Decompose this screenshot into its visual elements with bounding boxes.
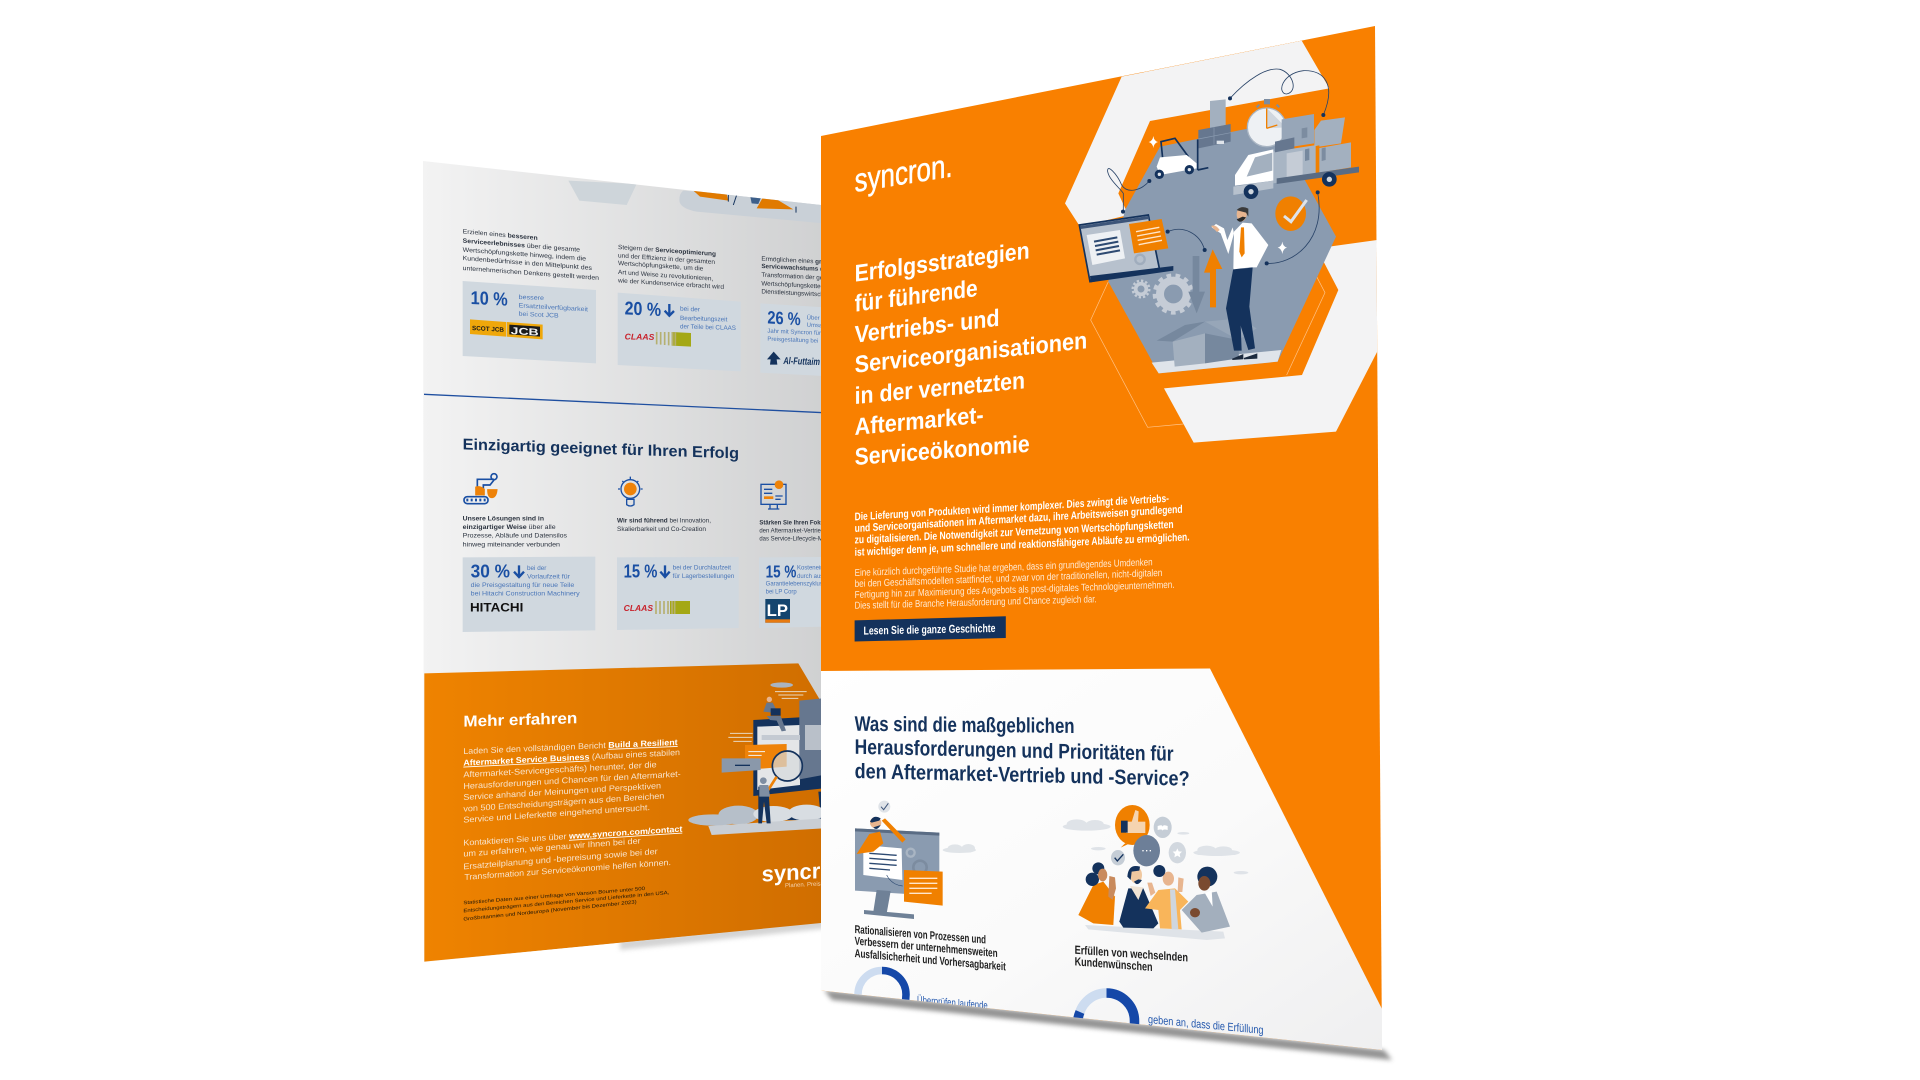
- open box: [1157, 318, 1257, 367]
- text: contact paragraph: um zu erfahren, wie genau wir Ihnen bei der: [463, 835, 641, 859]
- stat card: 10 %: 10 %: [471, 287, 508, 310]
- text: column 1: [463, 228, 600, 282]
- stat card: 15 % LP: bei LP Corp: [766, 589, 797, 595]
- text: report paragraph: Aftermarket-Servicegeschäfts) herunter, der die: [463, 759, 657, 779]
- section: learn more: [424, 663, 847, 962]
- panel: challenges section: [821, 668, 1382, 1050]
- text: study paragraph: Dies stellt für die Branche Herausforderung und Chance zugleich dar.: [855, 594, 1097, 612]
- text: report paragraph: Service anhand der Meinungen und Perspektiven: [463, 780, 661, 802]
- clouds: [1063, 819, 1248, 874]
- text: intro paragraph: ist wichtiger denn je, um schnellere und reaktionsfähigere Abläufe zu ermöglichen.: [855, 531, 1190, 559]
- icon: check badge: [1275, 196, 1307, 231]
- white hexagon frame upper: [1065, 41, 1329, 227]
- heading: Mehr erfahren: Mehr erfahren: [463, 710, 577, 731]
- outline hexagon: [1091, 282, 1183, 427]
- icon: light bulb: [618, 477, 643, 506]
- stat card: 15 % LP: Kosteneinsparung: [797, 565, 845, 571]
- page background left: [423, 161, 821, 962]
- text: column 2: wie der Kundenservice erbracht wird: [617, 277, 724, 291]
- text: report paragraph: von 500 Entscheidungsträgern aus den Bereichen: [463, 790, 665, 814]
- icon: check bubble: [878, 801, 890, 813]
- illustration: monitor and sheets: [855, 801, 976, 919]
- logo: syncron footer: syncron: [762, 857, 847, 887]
- text: column 2: und der Effizienz in der gesamten: [618, 252, 715, 266]
- text: strength 3: das Service-Lifecycle-Management: [759, 536, 853, 542]
- text: strength 3: [760, 520, 821, 542]
- panel: right brochure page: [821, 26, 1392, 1060]
- path lines: [1108, 69, 1329, 263]
- logo: Scot JCB: [470, 319, 543, 339]
- small bubbles: [1111, 817, 1186, 865]
- stat card: 15 %: [617, 557, 739, 630]
- floor: [1152, 350, 1281, 373]
- logo: syncron: syncron.: [855, 148, 953, 200]
- stat card: 15 %: für Lagerbestellungen: [673, 573, 735, 580]
- stat card: 20 %: bei der: [680, 306, 700, 313]
- scene: two tilted brochure pages: [423, 26, 1394, 1063]
- text: report paragraph: Laden Sie den vollständigen Bericht Build a Resilient: [463, 737, 678, 756]
- bubble: chat: [1133, 835, 1160, 866]
- arrows up and down: [1188, 249, 1222, 313]
- stat card: 20 %: [618, 293, 741, 371]
- text: column 2: [617, 244, 724, 291]
- text: column 3: Wertschöpfungskette,: [761, 280, 823, 290]
- truck with cargo: [1233, 114, 1359, 199]
- text: contact paragraph: Transformation zur Serviceökonomie helfen können.: [464, 857, 671, 882]
- text: column 1: Erzielen eines besseren: [463, 228, 538, 242]
- clock: [1247, 99, 1286, 147]
- text: column 3: Ermöglichen eines größeren: [761, 256, 843, 267]
- text: strength 3: den Aftermarket-Vertrieb und: [759, 528, 836, 534]
- button: Lesen Sie die ganze Geschichte: [855, 616, 1006, 642]
- icon: sparkles: [1149, 136, 1287, 254]
- stat card: 15 % LP: Garantielebenszyklus: [766, 582, 823, 588]
- stat card: 26 %: Über: [807, 314, 820, 322]
- table: [1085, 925, 1225, 940]
- text: study paragraph: bei den Geschäftsmodellen stattfindet, und zwar von der traditionellen, nicht-digitalen: [855, 568, 1162, 590]
- stat card: 26 %: Jahr mit Syncron für: [767, 329, 821, 337]
- text: report paragraph: Aftermarket Service Business (Aufbau eines stabilen: [463, 747, 680, 768]
- stat card: 15 %: 15 %: [624, 561, 658, 582]
- stacked boxes centre: [1198, 99, 1231, 148]
- text: intro paragraph: zu digitalisieren. Die Notwendigkeit zur Vernetzung von Wertschöpfungsketten: [855, 519, 1174, 546]
- white hexagon frame lower: [1164, 240, 1381, 443]
- text: column 1: Wertschöpfungskette hinweg, indem die: [463, 247, 587, 263]
- stat card: 26 %: Preisgestaltung bei: [767, 337, 818, 345]
- title: Erfolgsstrategien: Aftermarket-: [855, 402, 984, 441]
- stat card: 15 % LP: 15 %: [766, 562, 796, 582]
- text: column 3: [761, 256, 821, 296]
- text: column 3: Dienstleistungswirtschaft: [761, 288, 831, 299]
- logo: Scot JCB: JCB: [511, 326, 539, 339]
- text: footnote: Statistische Daten aus einer Umfrage von Vanson Bourne unter 500: [463, 886, 645, 906]
- cloud: [943, 844, 976, 853]
- text: study paragraph: Fertigung hin zur Maximierung des Angebots als post-digitales Technologieunternehmen.: [855, 580, 1175, 601]
- person: woman orange: [1078, 862, 1116, 925]
- heading: Herausforderungen: [855, 713, 1190, 791]
- icon: down arrow: [665, 304, 674, 316]
- stat card: 30 %: die Preisgestaltung für neue Teile: [471, 582, 575, 589]
- decorative tab: [568, 181, 637, 205]
- icon: down arrow: [514, 565, 524, 577]
- title: Erfolgsstrategien: Serviceorganisationen: [855, 327, 1087, 379]
- illustration: monitor and magnifier: [688, 682, 825, 835]
- logo: CLAAS: CLAAS: [625, 331, 655, 342]
- title: Erfolgsstrategien: [855, 237, 1087, 471]
- gears: [1133, 275, 1192, 313]
- text: contact paragraph: Ersatzteilplanung und -bepreisung sowie bei der: [463, 846, 658, 871]
- text: priority 2: [1075, 943, 1188, 974]
- text: strength 2: [617, 518, 710, 531]
- stat card: 15 % LP: durch aus: [797, 574, 823, 580]
- logo: Hitachi: HITACHI: [470, 602, 523, 615]
- text: column 2: Art und Weise zu revolutionieren,: [618, 269, 714, 283]
- text: report paragraph: [463, 737, 681, 825]
- text: column 1: Serviceerlebnisses über die gesamte: [463, 238, 581, 254]
- section: top results: [424, 181, 847, 462]
- text: intro paragraph: und Serviceorganisationen im Aftermarket dazu, ihre Arbeitsweisen grundlegend: [855, 504, 1183, 535]
- bubble: thumbs up: [1115, 805, 1150, 848]
- title: Erfolgsstrategien: in der vernetzten: [855, 367, 1025, 410]
- text: column 3: Servicewachstums durch die: [761, 263, 847, 274]
- text: report paragraph: Herausforderungen und Chancen für den Aftermarket-: [463, 769, 681, 791]
- icon: monitor with gear: [761, 480, 786, 509]
- top illustration fragment: [679, 191, 823, 223]
- logo: CLAAS: CLAAS: [624, 603, 653, 613]
- heading: Herausforderungen: den Aftermarket-Vertrieb und -Service?: [855, 760, 1190, 791]
- text: stat left: Überprüfen laufende: [917, 994, 988, 1012]
- stat card: 20 %: Bearbeitungszeit: [680, 315, 728, 323]
- text: priority 1: Verbessern der unternehmensweiten: [855, 936, 998, 960]
- icon: excavator: [464, 474, 497, 504]
- section: strengths: [463, 474, 853, 632]
- logo: Scot JCB: SCOT JCB: [472, 325, 504, 334]
- page shadow right: [824, 990, 1392, 1060]
- donut chart right: [1078, 993, 1134, 1049]
- text: study paragraph: [855, 557, 1175, 612]
- title: Erfolgsstrategien: Erfolgsstrategien: [855, 237, 1030, 288]
- stat card: 30 %: 30 %: [471, 561, 510, 582]
- text: column 2: Steigern der Serviceoptimierung: [618, 244, 716, 258]
- white section background: [821, 668, 1382, 1050]
- text: column 1: Kundenbedürfnisse in den Mittelpunkt des: [463, 255, 592, 272]
- text: priority 1: Rationalisieren von Prozessen und: [855, 924, 986, 947]
- stat card: 20 %: der Teile bei CLAAS: [680, 323, 736, 332]
- stat card: 30 %: Vorlaufzeit für: [527, 573, 570, 580]
- text: strength 1: Unsere Lösungen sind in: [463, 516, 544, 523]
- text: priority 2: Kundenwünschen: [1075, 954, 1153, 974]
- logo: syncron footer: [762, 866, 820, 888]
- stat card: 10 %: bei Scot JCB: [519, 311, 559, 320]
- text: strength 1: einzigartiger Weise über alle: [463, 524, 556, 531]
- text: strength 2: Wir sind führend bei Innovation,: [617, 517, 711, 524]
- laptop: [1079, 215, 1173, 282]
- page background orange: [821, 26, 1382, 1050]
- stat card: 20 %: 20 %: [625, 297, 661, 320]
- heading: Einzigartig geeignet: Einzigartig geeignet für Ihren Erfolg: [463, 436, 739, 462]
- text: priority 1: [855, 924, 1006, 973]
- icon: down arrow: [660, 565, 670, 577]
- person: man navy: [1119, 866, 1158, 928]
- logo: syncron footer: Planen. Preis: [785, 882, 821, 889]
- button: Lesen Sie die ganze Geschichte: Lesen Sie die ganze Geschichte: [864, 623, 996, 638]
- text: strength 1: Prozesse, Abläufe und Datensilos: [463, 532, 567, 539]
- forklift: [1155, 138, 1208, 179]
- stat card: 10 %: bessere: [519, 294, 545, 302]
- stat card: 15 %: bei der Durchlaufzeit: [673, 565, 731, 572]
- text: column 1: unternehmerischen Denkens gestellt werden: [463, 265, 600, 282]
- person: woman light orange: [1145, 865, 1188, 929]
- text: footnote: [463, 886, 669, 923]
- stat card: 15 % LP: [761, 557, 821, 628]
- stat card: 30 %: bei Hitachi Construction Machinery: [471, 590, 581, 597]
- text: study paragraph: Eine kürzlich durchgeführte Studie hat ergeben, dass ein grundlegendes Umdenken: [855, 557, 1153, 579]
- stat card: 30 %: [463, 557, 595, 632]
- stat card: 30 %: bei der: [527, 565, 546, 572]
- text: stat right: geben an, dass die Erfüllung: [1148, 1014, 1264, 1037]
- logo: LP: LP: [767, 601, 788, 620]
- heading: Herausforderungen: Herausforderungen und Prioritäten für: [855, 736, 1174, 766]
- person: man grey: [1182, 867, 1230, 933]
- text: report paragraph: Service und Lieferkette eingehend untersucht.: [463, 802, 650, 825]
- page shadow left: [620, 918, 830, 950]
- text: column 2: Wertschöpfungskette, um die: [618, 260, 704, 273]
- heading: Herausforderungen: Was sind die maßgeblichen: [855, 713, 1075, 738]
- text: column 3: Transformation der gesamten: [761, 272, 845, 283]
- panel: left brochure page: [423, 161, 853, 962]
- text: priority 2: Erfüllen von wechselnden: [1075, 943, 1188, 965]
- text: strength 2: Skalierbarkeit und Co-Creation: [617, 526, 706, 533]
- text: footnote: Großbritannien und Nordeuropa (November bis Dezember 2023): [463, 899, 637, 923]
- hero illustration: [1065, 41, 1381, 443]
- stat card: 26 %: [761, 304, 821, 376]
- text: contact paragraph: Kontaktieren Sie uns über www.syncron.com/contact: [463, 824, 683, 848]
- man: [1211, 207, 1268, 359]
- stat card: 10 %: [463, 281, 596, 363]
- text: footnote: Entscheidungsträgern aus den Bereichen Service und Lieferkette in den USA,: [463, 890, 669, 914]
- logo: Al-Futtaim: Al-Futtaim: [783, 356, 820, 368]
- text: strength 1: [463, 516, 567, 548]
- donut chart left: [858, 970, 906, 1018]
- title: Erfolgsstrategien: für führende: [855, 275, 978, 318]
- illustration: customers with speech bubbles: [1063, 805, 1248, 940]
- title: Erfolgsstrategien: Vertriebs- und: [855, 305, 1000, 349]
- stat card: 10 %: Ersatzteilverfügbarkeit: [519, 302, 588, 313]
- text: strength 1: hinweg miteinander verbunden: [463, 541, 561, 548]
- text: contact paragraph: [463, 824, 683, 882]
- text: intro paragraph: Die Lieferung von Produkten wird immer komplexer. Dies zwingt die Vertriebs-: [855, 493, 1169, 523]
- orange footer background: [424, 663, 823, 962]
- title: Erfolgsstrategien: Serviceökonomie: [855, 431, 1030, 471]
- text: strength 3: Stärken Sie Ihren Fokus auf: [759, 520, 838, 526]
- text: priority 1: Ausfallsicherheit und Vorhersagbarkeit: [855, 948, 1006, 973]
- stat card: 26 %: Umsatz: [807, 323, 827, 329]
- grey hexagon: [1108, 123, 1336, 373]
- text: intro paragraph: [855, 493, 1190, 559]
- stat card: 26 %: 26 %: [767, 307, 801, 329]
- divider line: [424, 394, 823, 413]
